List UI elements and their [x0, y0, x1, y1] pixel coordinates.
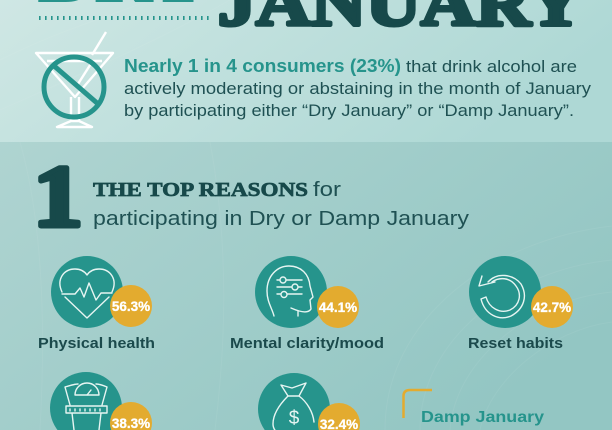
bracket accent — [404, 390, 432, 418]
intro text: that drink alcohol are — [406, 57, 577, 76]
intro text: by participating either “Dry January” or “Damp January”. — [124, 101, 574, 120]
item: physical health: 56.3% — [112, 299, 150, 314]
icon: money bag — [273, 383, 314, 430]
section heading — [93, 179, 469, 230]
item: mental clarity: 44.1% — [319, 300, 357, 315]
intro text: actively moderating or abstaining in the month of January — [124, 79, 592, 98]
icon: reset arrow — [479, 275, 524, 318]
section heading: for — [313, 179, 341, 201]
section heading: participating in Dry or Damp January — [93, 208, 469, 230]
item: money — [258, 373, 360, 430]
item: reset habits: 42.7% — [533, 300, 571, 315]
item: reset habits — [468, 256, 573, 352]
callout: damp january: Damp January — [421, 409, 544, 426]
item: mental clarity — [230, 256, 384, 352]
item: reset habits: Reset habits — [468, 335, 563, 352]
icon: head with sliders — [267, 266, 313, 316]
intro text — [124, 56, 592, 120]
icon: crossed-out cocktail glass — [36, 32, 113, 127]
section heading: THE TOP REASONS — [93, 179, 308, 201]
item: physical health — [38, 256, 155, 352]
item: physical health: Physical health — [38, 335, 155, 352]
section number 1: 1 — [33, 149, 83, 246]
intro text: Nearly 1 in 4 consumers (23%) — [124, 56, 401, 76]
icon: heart with pulse — [60, 269, 114, 318]
item: weight — [50, 372, 152, 430]
icon: scale and tape measure — [65, 383, 107, 430]
item: mental clarity: Mental clarity/mood — [230, 335, 384, 352]
item: money: $ — [289, 408, 300, 429]
